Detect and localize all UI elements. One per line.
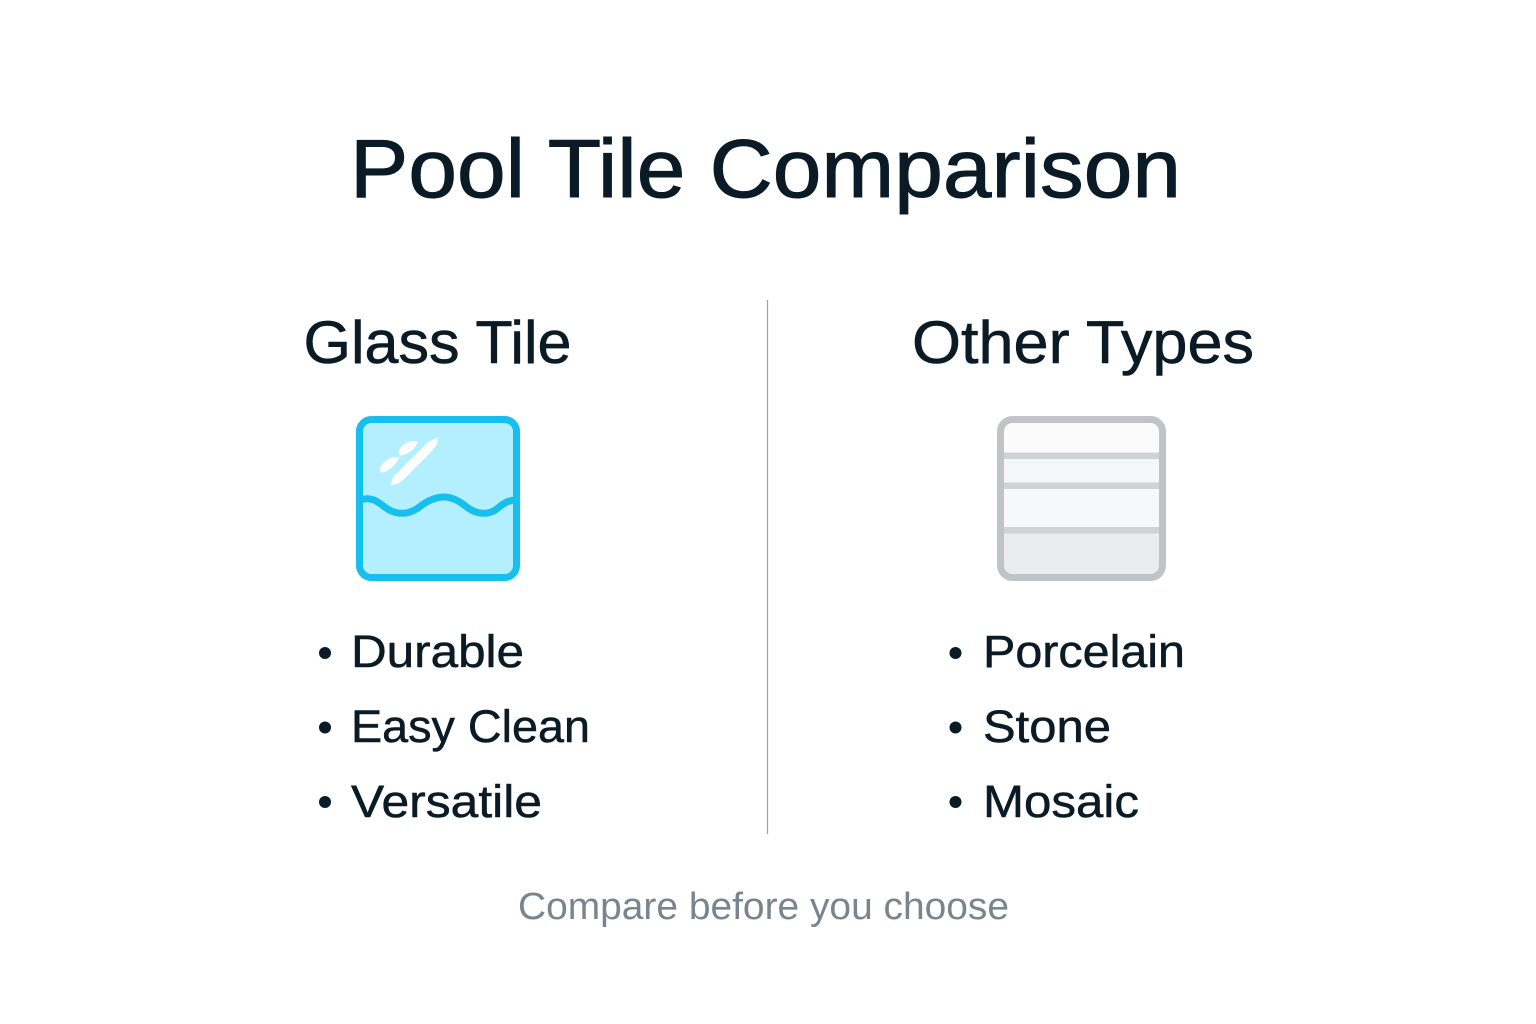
list: other tile types: Porcelain [983,626,1185,677]
icon: glass tile [360,420,516,578]
icon: layered tile [1000,420,1162,578]
list: glass tile benefits: Easy Clean [351,701,590,752]
list: glass tile benefits: Versatile [351,776,542,827]
list: other tile types: Stone [983,701,1111,752]
list: other tile types [950,626,1185,827]
panel: other types [912,309,1254,827]
list: glass tile benefits: Durable [351,626,524,677]
heading: glass tile: Glass Tile [304,309,572,376]
heading: other types: Other Types [912,309,1254,376]
panel: glass tile [304,309,590,827]
list: glass tile benefits [319,626,590,827]
list: other tile types: Mosaic [983,776,1139,827]
title: Pool Tile Comparison [350,122,1181,215]
footer caption: Compare before you choose [518,886,1009,928]
